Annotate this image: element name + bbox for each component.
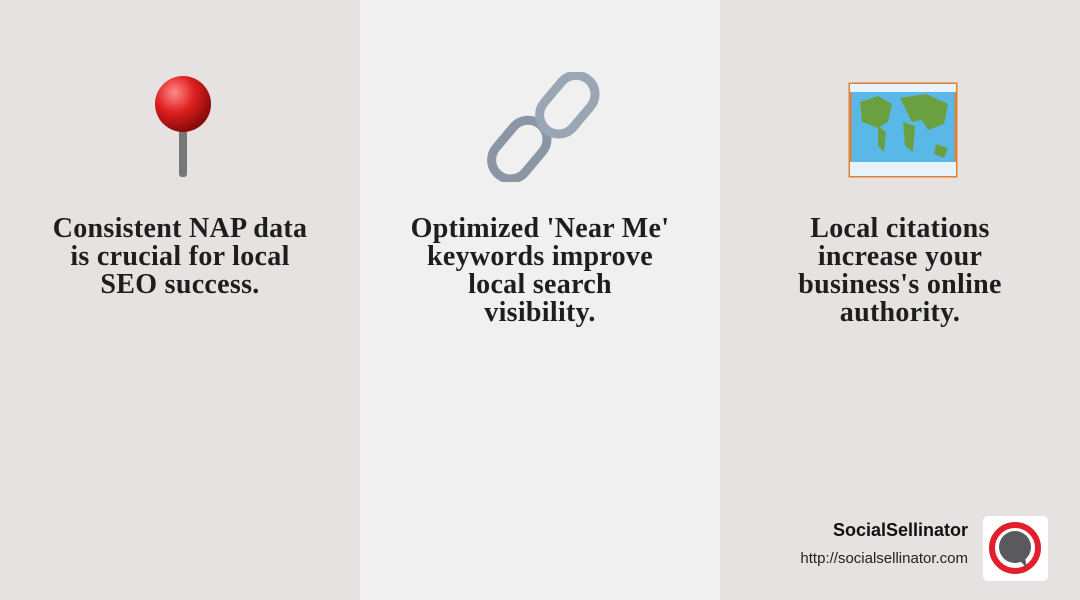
text: near me: keywords improve [427,241,653,272]
text: citations [798,213,1002,328]
text: near me: visibility. [484,297,596,328]
brand block [800,516,1048,581]
text: citations: business's online [798,269,1002,300]
panel: citations [720,0,1080,600]
brand url: http://socialsellinator.com [800,550,968,567]
panel: NAP [0,0,360,600]
logo [983,516,1048,581]
text: NAP: is crucial for local [70,241,290,272]
text: near me [411,213,669,328]
text: NAP [53,213,307,300]
text: near me: local search [468,269,612,300]
icon: chain link [487,72,600,182]
text: citations: authority. [840,297,960,328]
brand name: SocialSellinator [833,520,968,540]
text: NAP: Consistent NAP data [53,213,307,244]
panel: near me [360,0,720,600]
icon: world map [848,82,958,178]
text: NAP: SEO success. [100,269,260,300]
text: citations: Local citations [810,213,990,244]
text: near me: Optimized 'Near Me' [411,213,669,244]
icon: pushpin [155,76,211,177]
text: citations: increase your [818,241,982,272]
